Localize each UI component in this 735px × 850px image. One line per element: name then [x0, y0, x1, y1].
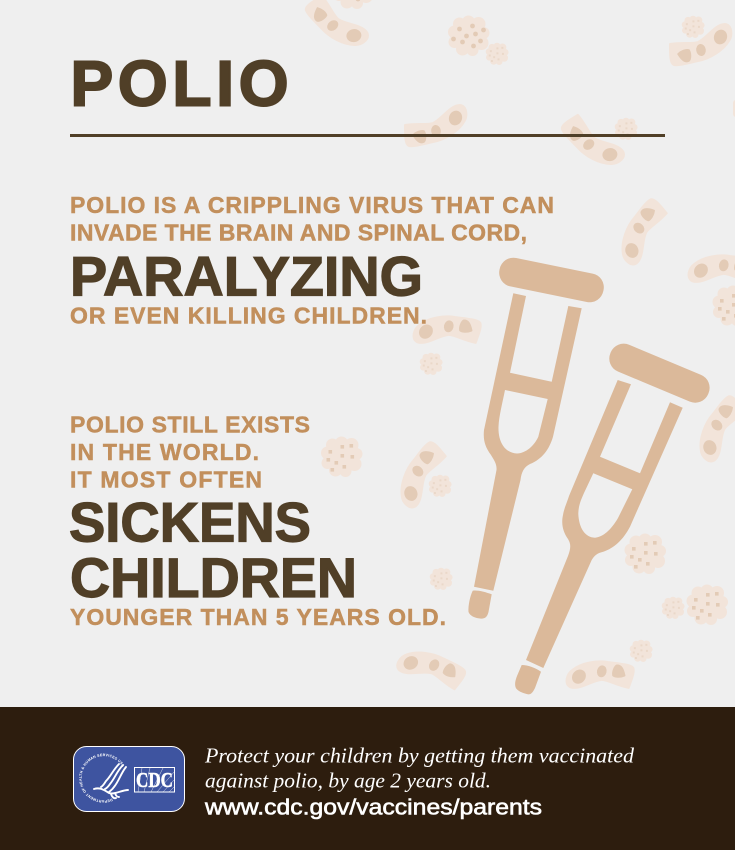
line: in the world: IN THE WORLD. — [70, 439, 259, 465]
line: polio still exists: POLIO STILL EXISTS — [70, 412, 310, 438]
line: or even killing children: OR EVEN KILLING CHILDREN. — [70, 302, 427, 328]
virus: blob top — [448, 16, 490, 56]
line: it most often: IT MOST OFTEN — [70, 467, 262, 493]
line: protect your children: Protect your children by getting them vaccinated — [204, 744, 635, 768]
virus: small blob low — [430, 568, 453, 590]
logo: HHS and CDC — [73, 746, 185, 812]
virus: blob lower right — [686, 584, 728, 625]
title: POLIO — [70, 48, 288, 120]
virus: small blob mid — [429, 475, 452, 497]
crutch tip — [515, 665, 541, 694]
logo: HHS eagle — [94, 764, 128, 798]
virus: small blob top — [486, 43, 509, 65]
line: younger than 5: YOUNGER THAN 5 YEARS OLD. — [70, 604, 446, 630]
virus: small blob near rule — [615, 118, 638, 140]
virus: bean far right — [684, 394, 735, 464]
virus: bean near rule — [560, 105, 627, 178]
crutch frame — [526, 380, 683, 668]
virus: bean top left — [304, 0, 371, 59]
crutch tip — [468, 591, 492, 619]
emphasis: children: CHILDREN — [70, 547, 357, 609]
emphasis: sickens: SICKENS — [69, 491, 311, 553]
virus: bean top centre — [405, 105, 466, 146]
virus: bean bottom left — [394, 634, 468, 705]
logo badge — [74, 746, 184, 812]
icon: left crutch — [468, 255, 606, 619]
virus: bean right edge — [686, 240, 735, 301]
emphasis: paralyzing: PARALYZING — [70, 245, 423, 307]
virus: bean top right — [670, 24, 731, 65]
virus: large blob right edge — [712, 286, 735, 326]
virus: blob under crutch — [624, 534, 666, 574]
icon: right crutch — [515, 339, 714, 694]
virus: blob top edge — [332, 0, 374, 9]
virus: small blob by text — [420, 353, 443, 375]
crutch pad — [605, 339, 714, 407]
footer message — [204, 744, 635, 820]
line: polio is a crippling virus: POLIO IS A CRIPPLING VIRUS THAT CAN — [70, 192, 554, 218]
crutch pad — [497, 255, 606, 305]
virus: small blob lower right — [662, 597, 685, 619]
virus: sliver right edge — [733, 100, 735, 117]
virus: bean by text — [411, 301, 483, 362]
text block: polio still exists — [69, 412, 446, 630]
line: invade the brain: INVADE THE BRAIN AND SPINAL CORD, — [70, 220, 527, 246]
virus: bean bottom right — [564, 646, 636, 707]
virus: blob mid — [321, 436, 362, 477]
virus particles background — [304, 0, 735, 707]
footer band — [0, 707, 735, 850]
line: against polio: against polio, by age 2 years old. — [205, 769, 491, 793]
virus: small blob bottom — [630, 640, 653, 662]
title rule — [70, 134, 665, 137]
virus: bean mid — [385, 440, 458, 510]
logo: CDC box: CDC — [136, 768, 173, 792]
url: www.cdc.gov/vaccines/parents — [204, 794, 542, 820]
crutch frame — [474, 293, 582, 591]
virus: bean upright right — [606, 197, 679, 267]
text block: what polio does — [70, 192, 554, 328]
logo: HHS ring text: DEPARTMENT OF HEALTH & HUMAN SERVICES USA — [79, 754, 124, 803]
virus: small blob top right — [682, 16, 705, 38]
